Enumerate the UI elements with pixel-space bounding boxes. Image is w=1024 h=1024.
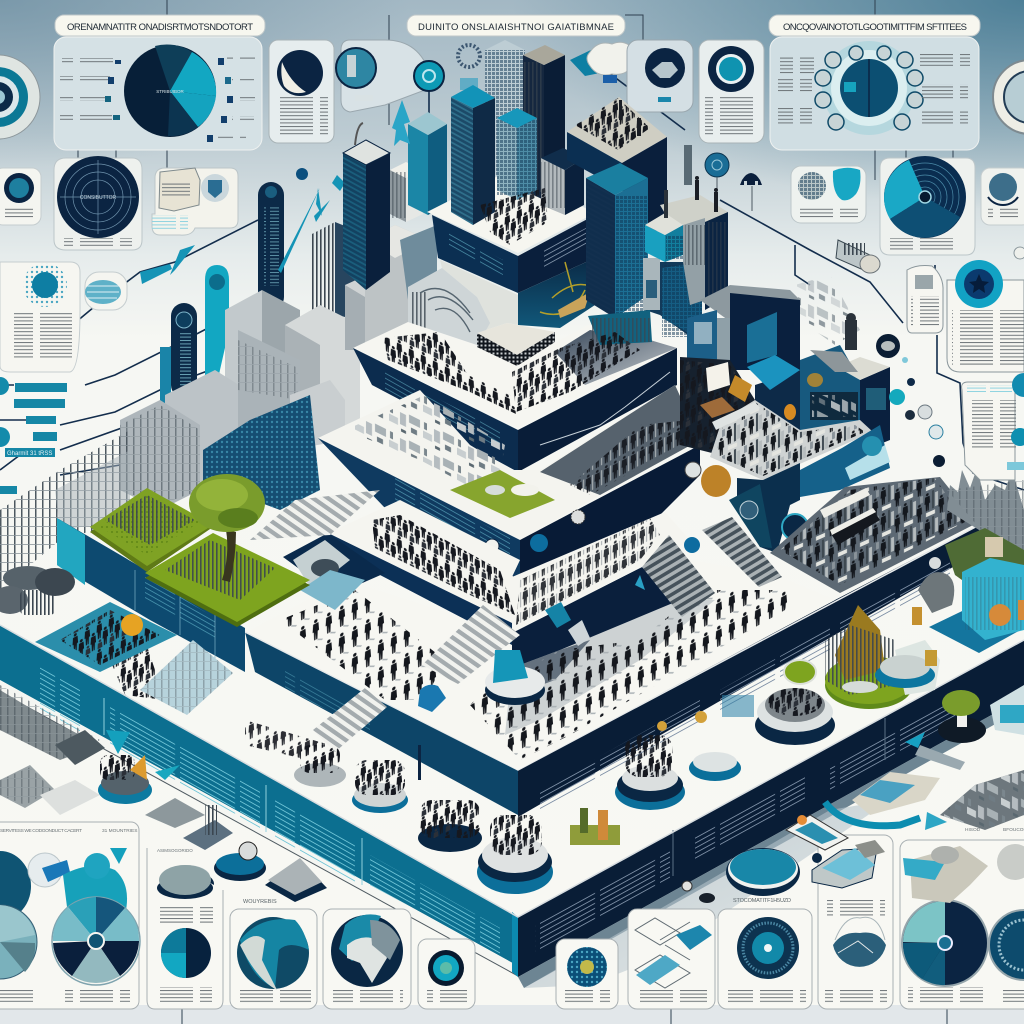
lower left machines	[0, 685, 233, 850]
pedestal	[418, 800, 482, 852]
pedestal row bottom left	[158, 842, 327, 902]
tower	[541, 148, 584, 215]
under-lawn wall	[57, 518, 245, 672]
machinery	[345, 395, 505, 500]
floor H crowd	[770, 477, 977, 593]
panel: ring diagram	[770, 37, 979, 150]
floor icon	[682, 881, 715, 903]
crowd on F	[372, 515, 515, 615]
card: small gadget	[907, 266, 943, 333]
tower	[485, 40, 525, 180]
tree	[189, 474, 265, 582]
pedestal	[615, 735, 685, 810]
tier A walls	[0, 625, 1024, 988]
lawn cut	[450, 470, 555, 518]
dial: top right	[993, 60, 1024, 134]
dark machinery block	[680, 285, 890, 553]
pedestal	[352, 760, 408, 813]
small icon cluster right	[889, 357, 945, 467]
tower	[497, 108, 537, 200]
pedestal: cyan	[485, 650, 545, 705]
icon: teal cards	[657, 695, 754, 731]
icons on band	[485, 510, 585, 553]
icons: dial and arch	[684, 145, 762, 211]
floor F	[283, 500, 690, 645]
platform: teal building	[912, 528, 1024, 653]
tree icon	[392, 100, 410, 146]
left teal band	[0, 625, 518, 976]
city block: fence	[0, 430, 130, 590]
city block: grey towers	[120, 162, 437, 510]
right navy band	[518, 640, 1024, 988]
panel: badge cards row 2 right	[791, 166, 866, 223]
pen / arrow	[905, 732, 965, 770]
cyan arc arrow	[825, 802, 947, 830]
stairs	[250, 490, 520, 752]
title pill: left	[55, 15, 265, 36]
garden scene	[570, 808, 620, 845]
people: lower floor right	[470, 590, 790, 760]
water screen with crowd	[35, 602, 233, 715]
tower	[343, 123, 390, 290]
upper platform C	[427, 170, 595, 328]
panel: sonar pie	[880, 156, 975, 255]
tier B walls	[57, 518, 1000, 817]
panel: navy circle card	[627, 40, 693, 112]
panel: small badge right	[981, 168, 1024, 225]
floor E: machinery level	[318, 385, 700, 580]
icon: gear	[458, 45, 480, 90]
panel: cyan circle	[418, 939, 475, 1009]
panel: speech bubble card	[152, 168, 238, 235]
connector lines	[0, 68, 1024, 490]
gold plate	[807, 373, 823, 387]
dial: top left	[0, 55, 40, 139]
panel: concentric circle: CONSIBUTTOR	[80, 195, 117, 201]
floor with crowd	[710, 400, 873, 480]
panel: globe card	[269, 40, 334, 143]
panel: small badge left	[0, 168, 41, 225]
orange shield	[784, 404, 796, 420]
pie chart	[124, 44, 216, 137]
lawn pedestal: gold house	[825, 605, 913, 709]
pedestal	[294, 745, 346, 787]
floor G: lower people floor	[247, 560, 835, 770]
title pill: right	[769, 15, 980, 36]
grey parts	[940, 770, 1024, 830]
right side text panels	[907, 247, 1024, 480]
label: STOCOMATITF1H5UZD	[733, 898, 791, 904]
panel: pie and pedestal: ASIMSOGORIDO	[157, 848, 193, 853]
pedestal	[755, 688, 835, 745]
tower	[408, 112, 447, 215]
navy pill: left tall	[258, 182, 284, 310]
people: lower floor left	[280, 590, 445, 700]
tree pedestal	[938, 690, 986, 743]
tower	[451, 85, 495, 225]
people: lower left	[110, 640, 330, 765]
arch building	[408, 260, 518, 347]
panel: circle icon card	[699, 40, 764, 143]
cyan devices	[990, 685, 1024, 735]
panel: concentric circle	[54, 156, 142, 250]
tower	[523, 45, 565, 200]
icon: robot	[918, 557, 954, 613]
icon: teal node	[414, 61, 444, 91]
panel: landscape circle	[818, 835, 893, 1009]
brick block	[477, 323, 555, 366]
icon: star dial	[955, 260, 1003, 308]
panel: small disc	[85, 272, 127, 310]
panel: radial disc	[718, 909, 812, 1009]
lawns	[90, 488, 310, 627]
lawn mound	[784, 660, 816, 684]
small scattered icons above machinery	[795, 275, 900, 358]
teal glass	[800, 425, 890, 497]
band icons	[545, 537, 700, 646]
floor D: top crowd	[353, 310, 677, 472]
labels bottom right: HISOD	[965, 827, 981, 833]
panel: twin wheels: SERVITESS WE CODGONDUCT CACERT	[0, 828, 82, 834]
pie chart: STRIBUIBOR	[156, 89, 184, 94]
crowd on platform C	[480, 188, 548, 245]
tree	[418, 685, 446, 780]
panel: scatter dot card	[0, 262, 80, 372]
crowd on floor D	[383, 332, 640, 414]
cards stack	[875, 640, 940, 695]
title pill: centre	[407, 15, 625, 36]
title pill: centre: DUINITO ONSLAIAISHTNOI GAIATIBMNAE	[418, 22, 614, 33]
cloud plate	[852, 772, 940, 815]
title pill: left: ORENAMNATITR ONADISRTMOTSNDOTORT	[67, 22, 253, 33]
grey discs	[0, 566, 75, 615]
plate and devices	[726, 815, 885, 896]
pedestal	[477, 815, 553, 894]
panel: twin wheels	[0, 822, 140, 1009]
skyline right	[947, 468, 1024, 570]
dark stairs	[642, 517, 782, 617]
icon: cloud	[570, 42, 638, 83]
panel: pie chart	[54, 37, 262, 150]
arrows	[140, 168, 345, 284]
panel strip teal	[160, 347, 171, 412]
panel: patterned disc	[556, 939, 618, 1009]
gadget	[836, 240, 880, 273]
panel: globe two	[323, 909, 411, 1009]
scale machine	[903, 844, 1024, 903]
panel: pie and pedestal	[147, 848, 223, 1009]
cyan pill	[205, 265, 229, 392]
crowd on floor E	[570, 420, 690, 495]
wall shadow	[524, 800, 890, 988]
label tags	[0, 377, 67, 494]
panel: blueprint	[628, 909, 715, 1009]
label tags: Gharmit 31 tRSS	[7, 451, 52, 457]
teal glass base	[588, 310, 652, 345]
wheel	[52, 897, 140, 985]
navy pill: short	[171, 303, 197, 398]
gold badge	[701, 465, 731, 497]
roof platform with crowd	[567, 97, 667, 240]
panel: building node card	[336, 40, 430, 112]
small pedestal	[689, 752, 741, 781]
table	[700, 397, 735, 418]
navy wall	[737, 463, 800, 553]
panel: twin wheels: 31 MOUNTRIES	[102, 828, 137, 834]
F band right	[512, 567, 680, 668]
isolated figure group	[619, 100, 718, 212]
labels bottom right	[965, 827, 1024, 833]
teal tower	[586, 163, 648, 318]
title pill: right: ONCQOVAINOTOTLGOOTIMITTFIM SFTITEES	[783, 22, 967, 33]
panel: globe one	[230, 909, 317, 1009]
circuit wall	[203, 395, 320, 510]
teal marker	[106, 730, 130, 754]
mid tower complex	[643, 190, 728, 345]
label: WOUYREBIS	[243, 899, 277, 905]
panel: right wheels	[900, 840, 1024, 1009]
